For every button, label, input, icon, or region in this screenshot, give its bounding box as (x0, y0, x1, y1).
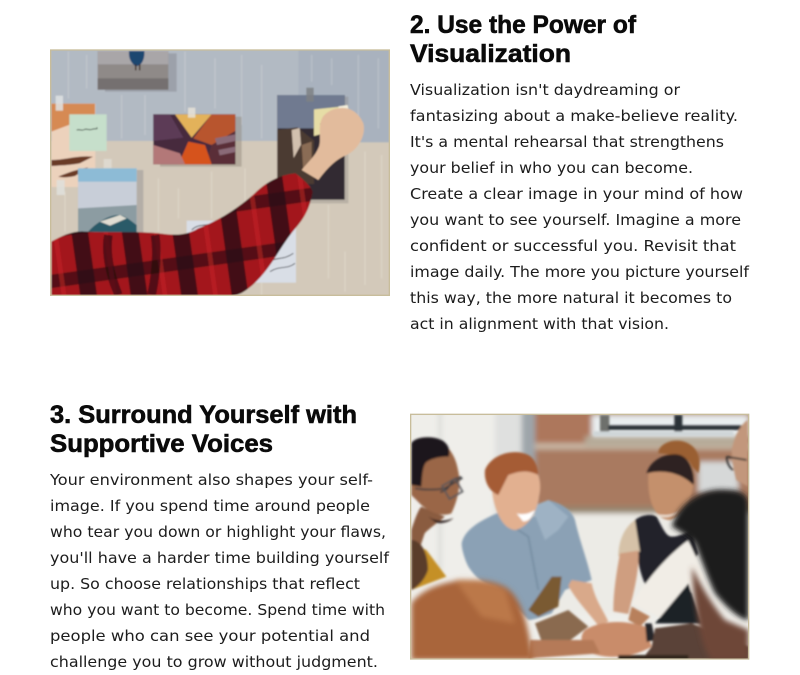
text block: section 3 paragraph: who you want to become. Spend time with (50, 601, 385, 619)
red flannel sleeve (51, 173, 313, 296)
yellow shoulder (411, 543, 446, 590)
text block: section 2 paragraph: this way, the more natural it becomes to (410, 289, 732, 307)
shadows (105, 53, 177, 92)
right man with glasses (732, 420, 748, 487)
desert photo left (51, 104, 95, 187)
heading: section 3: Supportive Voices (50, 430, 273, 458)
text block: section 2 paragraph: Create a clear image in your mind of how (410, 185, 743, 203)
text block: section 2 paragraph: your belief in who you can become. (410, 159, 693, 177)
text block: section 3 paragraph: up. So choose relationships that reflect (50, 575, 360, 593)
heading: section 3: 3. Surround Yourself with (50, 401, 357, 429)
heading: section 2 (410, 11, 637, 68)
sea photo (78, 181, 138, 209)
text block: section 3 paragraph: Your environment also shapes your self- (49, 471, 373, 489)
text block: section 3 paragraph (49, 471, 390, 671)
text block: section 2 paragraph: image daily. The more you picture yourself (410, 263, 750, 281)
text block: section 3 paragraph: who tear you down or highlight your flaws, (50, 523, 386, 541)
photo: hand pinning a note to a vision board (50, 49, 390, 296)
sketch sheet (187, 221, 296, 283)
text block: section 2 paragraph: fantasizing about a make-believe reality. (410, 107, 738, 125)
central man shirt (462, 500, 592, 620)
table and hands (535, 610, 588, 642)
dark tall photo (276, 127, 346, 200)
text block: section 2 paragraph (410, 81, 750, 333)
text block: section 2 paragraph: you want to see yourself. Imagine a more (410, 211, 741, 229)
text block: section 2 paragraph: It's a mental rehearsal that strengthens (410, 133, 724, 151)
central man forearm (568, 580, 608, 626)
yellow note (312, 106, 340, 137)
heading: section 3 (50, 401, 357, 458)
woman right (658, 441, 700, 473)
text block: section 3 paragraph: image. If you spend time around people (50, 497, 370, 515)
heading: section 2: 2. Use the Power of (410, 11, 637, 39)
canyon photo (153, 114, 235, 164)
text block: section 3 paragraph: you'll have a harder time building yourself (50, 549, 390, 567)
text block: section 3 paragraph: challenge you to grow without judgment. (50, 653, 378, 671)
white sleeve (643, 538, 698, 620)
man left (411, 507, 445, 553)
text block: section 2 paragraph: Visualization isn't daydreaming or (410, 81, 681, 99)
text block: section 2 paragraph: confident or successful you. Revisit that (410, 237, 736, 255)
text block: section 3 paragraph: people who can see your potential and (50, 627, 370, 645)
central man head (492, 466, 540, 530)
arm (302, 108, 364, 180)
text block: section 2 paragraph: act in alignment with that vision. (410, 315, 669, 333)
background (405, 410, 755, 665)
foreground dark head (672, 490, 748, 620)
photo beach (97, 64, 169, 80)
heading: section 2: Visualization (410, 40, 571, 68)
mint note (69, 114, 107, 151)
foreground red-haired head (411, 580, 533, 660)
photo: team stacking hands around a table (410, 414, 750, 660)
